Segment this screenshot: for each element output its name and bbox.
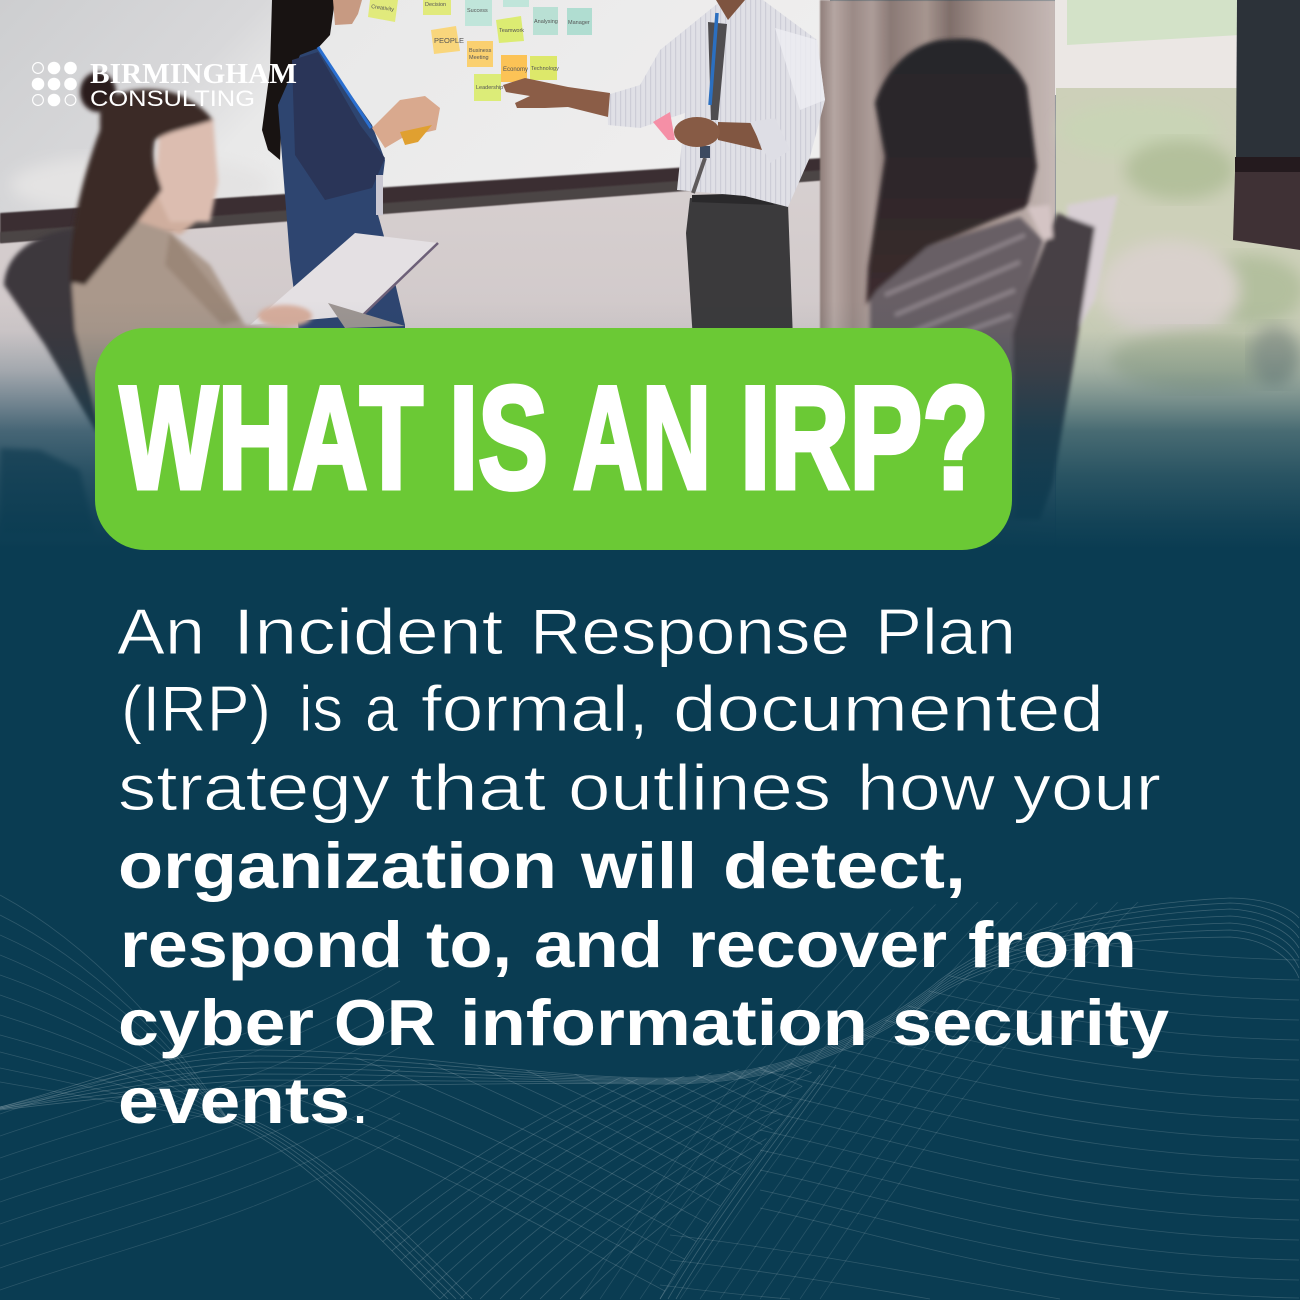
word: AN: AN	[573, 356, 711, 519]
belt	[692, 193, 775, 205]
lower ribbon	[230, 1114, 472, 1299]
seated woman at right, blurred	[866, 39, 1118, 520]
whiteboard	[0, 0, 830, 215]
placket strap	[708, 22, 727, 120]
forearm	[718, 122, 762, 150]
line 5 bold: from	[968, 908, 1137, 981]
note: Leadership: Leadership	[476, 85, 503, 91]
hand	[258, 305, 312, 327]
lanyard	[710, 13, 717, 105]
dress	[278, 48, 405, 340]
logo wordmark bottom: CONSULTING	[90, 86, 255, 111]
collar	[1027, 205, 1053, 240]
note: Decision: Decision	[425, 2, 446, 8]
title text	[120, 356, 989, 519]
pointing arm	[503, 78, 610, 117]
line 2: is	[299, 672, 343, 745]
photo: meeting room scene	[0, 0, 1300, 562]
note: top	[503, 0, 529, 7]
logo wordmark top: BIRMINGHAM	[90, 58, 297, 90]
line 1: An	[117, 595, 205, 668]
shirt cuff	[750, 118, 790, 163]
shirt	[870, 217, 1043, 520]
note: Teamwork: Teamwork	[499, 28, 524, 34]
line 3: that	[410, 751, 546, 824]
note: Leadership	[474, 74, 503, 101]
note: Teamwork	[496, 16, 524, 43]
man presenting	[503, 0, 825, 340]
face	[155, 118, 218, 222]
note: Analysing	[533, 7, 558, 35]
foliage patches	[1060, 102, 1220, 158]
desk at left	[0, 448, 95, 535]
note: Analysing: Analysing	[534, 19, 558, 25]
monitor band	[1235, 157, 1300, 172]
right arcs	[660, 934, 1299, 1300]
clipboard	[250, 233, 438, 325]
neck	[716, 0, 745, 20]
badge	[700, 146, 710, 158]
lanyard	[318, 47, 371, 128]
central ribbon	[0, 898, 1299, 1110]
logo: Birmingham Consulting	[32, 58, 297, 111]
trousers	[686, 198, 793, 340]
hair	[262, 0, 335, 160]
word: WHAT: WHAT	[120, 356, 423, 519]
note: Technology: Technology	[531, 66, 559, 72]
mesh falling lines	[260, 1057, 812, 1292]
note: Technology	[530, 56, 559, 80]
line 2: a	[365, 672, 399, 745]
window frame	[1055, 0, 1240, 95]
line 5 bold: to,	[426, 908, 512, 981]
line 1: Incident	[233, 595, 503, 668]
forearm and hand	[372, 96, 440, 148]
line 2: documented	[673, 672, 1104, 745]
window	[1055, 0, 1300, 560]
note: PEOPLE	[431, 26, 464, 54]
lower wall	[0, 150, 830, 560]
shirt	[607, 0, 825, 207]
curtain	[820, 0, 1056, 560]
woman in navy dress	[250, 0, 440, 340]
lapel	[165, 232, 240, 325]
line 3: outlines	[568, 751, 831, 824]
note: Economy: Economy	[503, 67, 528, 73]
monitor at right	[1233, 0, 1300, 250]
wave line pattern	[0, 870, 1299, 1299]
line 2: formal,	[421, 672, 649, 745]
note: Decision	[423, 0, 451, 15]
word: IRP?: IRP?	[740, 356, 989, 519]
line 5 bold: and	[534, 908, 663, 981]
shirt highlight	[775, 28, 825, 110]
hair	[866, 39, 1037, 305]
note: Business Meeting: Business	[469, 48, 492, 54]
view below sill	[1056, 88, 1300, 560]
shirt stripes	[885, 235, 1025, 350]
notes in hand	[400, 125, 432, 145]
left rising lines	[0, 959, 400, 1290]
note: Business Meeting: Meeting	[469, 55, 489, 61]
badge	[376, 175, 383, 215]
line 6 bold: OR	[334, 986, 436, 1059]
chair	[4, 228, 110, 440]
whiteboard rail	[0, 158, 823, 243]
line 6 bold: information	[460, 986, 868, 1059]
monitor lower	[1233, 172, 1300, 250]
chair	[1000, 213, 1095, 520]
line 1: Response	[530, 595, 850, 668]
line 1	[117, 595, 1016, 668]
line 5 bold: respond	[120, 908, 403, 981]
word: IS: IS	[449, 356, 548, 519]
mesh right edge	[660, 1065, 836, 1299]
note: Creativity: Creativity	[371, 4, 395, 13]
title banner	[95, 328, 1012, 550]
line 2: (IRP)	[121, 672, 271, 745]
line 4 bold: detect,	[723, 829, 966, 902]
left fan lines	[0, 895, 230, 1122]
fade overlay	[0, 300, 1300, 562]
face	[333, 0, 362, 25]
window glass	[1067, 0, 1240, 45]
note: Manager: Manager	[568, 20, 590, 26]
note: PEOPLE: PEOPLE	[434, 36, 464, 45]
body paragraph	[117, 595, 1169, 1137]
line 3	[118, 751, 1161, 824]
line 3: strategy	[118, 751, 391, 824]
seated woman at left	[4, 72, 312, 440]
line 4 bold: organization	[118, 829, 557, 902]
hair bun	[80, 72, 116, 112]
line 3: your	[1013, 751, 1161, 824]
neck	[135, 190, 205, 235]
line 5 bold: recover	[688, 908, 947, 981]
line 5 bold	[120, 908, 1137, 981]
line 6 bold: cyber	[118, 986, 314, 1059]
rail lower band	[0, 170, 823, 243]
monitor upper	[1236, 0, 1300, 160]
line 7 period: .	[351, 1064, 369, 1137]
line 7 bold: events	[118, 1064, 350, 1137]
sleeve	[292, 52, 385, 200]
laptop lid	[328, 303, 405, 328]
line 6 bold: security	[892, 986, 1169, 1059]
lower hand	[674, 117, 720, 147]
note: Success: Success	[467, 8, 488, 14]
jacket	[72, 218, 300, 430]
pink note	[653, 112, 675, 140]
badge strap	[693, 158, 705, 193]
banner background	[95, 328, 1012, 550]
clipboard edge	[363, 243, 438, 315]
central mesh	[260, 1057, 820, 1300]
note: Economy	[501, 55, 528, 82]
line 1: Plan	[875, 595, 1016, 668]
mesh rising lines	[373, 1060, 820, 1300]
line 3: how	[857, 751, 996, 824]
upper right hatch	[580, 900, 1140, 1299]
line 4 bold: will	[580, 829, 697, 902]
note: Creativity	[368, 0, 398, 22]
paper behind chair	[1050, 195, 1118, 378]
line 2	[121, 672, 1104, 745]
sticky notes on the board	[368, 0, 592, 101]
line 4 bold	[118, 829, 966, 902]
board light patch	[10, 155, 270, 215]
note: Manager	[567, 8, 592, 35]
line 6 bold	[118, 986, 1169, 1059]
hair	[70, 89, 213, 285]
note: Business Meeting	[467, 41, 493, 67]
note: Success	[465, 0, 492, 26]
logo dots	[32, 62, 77, 106]
